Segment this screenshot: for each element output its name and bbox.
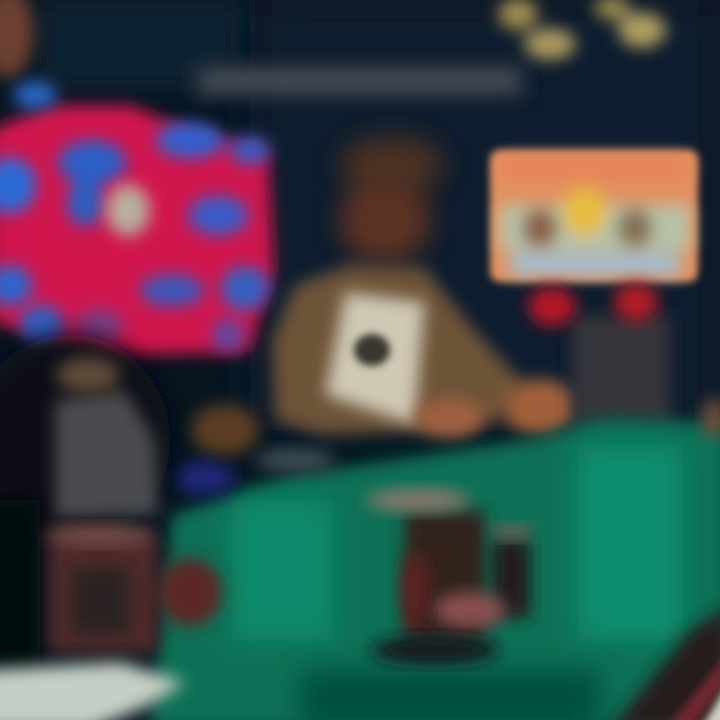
panel: arcade screen right <box>490 150 698 282</box>
forearm <box>191 404 259 456</box>
slot machine base <box>528 282 670 425</box>
title: blurred heading bar <box>192 62 527 100</box>
foreground chip stacks left <box>45 525 222 653</box>
panel: pink and blue pattern <box>0 81 274 355</box>
skin tone figure top left <box>0 0 34 78</box>
grey cards by table edge <box>255 448 335 472</box>
gold coins top right <box>498 0 666 60</box>
white cards bottom left <box>0 662 185 720</box>
shirt card <box>325 292 425 425</box>
figure: card player <box>191 135 578 456</box>
foreground figure left <box>0 335 170 670</box>
hair <box>340 135 444 195</box>
icon: spade on card <box>354 334 390 366</box>
center chip stacks <box>366 488 534 664</box>
table: green felt <box>150 418 720 720</box>
torso <box>272 265 525 435</box>
bottom right corner object <box>610 605 720 720</box>
icon: white chip on pattern <box>106 184 150 236</box>
face <box>339 176 431 264</box>
hand right edge <box>702 398 720 438</box>
left hand <box>416 398 484 438</box>
blue chips by forearm <box>175 460 235 496</box>
right hand <box>502 379 578 435</box>
